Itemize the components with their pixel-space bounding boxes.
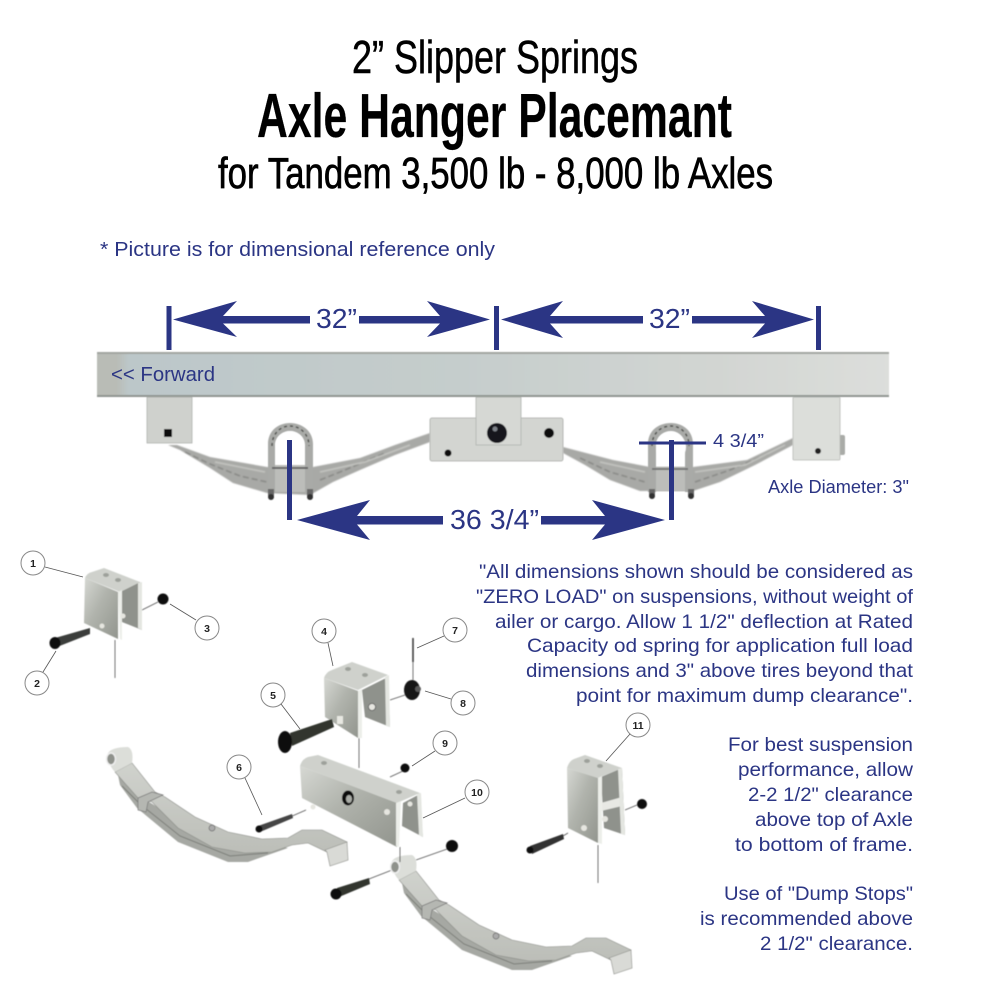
text block: zero load note: "All dimensions shown should be considered as [479,561,913,583]
bolt [526,834,564,854]
title line: tandem axle range: for Tandem 3,500 lb - 8,000 lb Axles [218,149,773,198]
dimension: 4 3/4 inch [639,430,764,451]
text block: clearance recommendation: performance, allow [738,759,914,781]
callout 3: 3 [204,623,210,635]
side view of suspension [97,301,909,540]
right hanger [793,397,845,460]
callout 2 [25,651,56,695]
text block: dump stops: 2 1/2" clearance. [760,933,913,955]
dimension: 4 3/4 inch: 4 3/4” [713,430,764,451]
callout 5: 5 [270,690,276,702]
dimension: 32 inch right: 32” [649,303,690,334]
text block: zero load note: point for maximum dump clearance". [576,685,913,707]
right leaf spring [563,438,793,491]
callout 1 [21,551,83,577]
text block: zero load note: "ZERO LOAD" on suspensions, without weight of [476,586,914,608]
leaf spring upper left [106,747,348,866]
nut [637,799,647,809]
callout 3 [170,604,219,640]
part group 2: upper hanger, bolt, nut, pin [278,638,421,768]
hanger 11 [567,755,625,844]
leaf spring lower right [330,840,632,974]
text block: dump stops: Use of "Dump Stops" [724,883,913,905]
callout 4: 4 [321,626,327,638]
callout 8: 8 [460,698,466,710]
text block: dump stops: is recommended above [700,908,913,930]
equalizer block 10 [300,755,423,847]
center equalizer block and hanger [430,397,563,461]
text block: dump stops [700,883,913,955]
text block: zero load note [476,561,914,707]
callout 1: 1 [30,558,36,570]
text block: clearance recommendation: 2-2 1/2" clearance [748,784,913,806]
text block: zero load note: dimensions and 3" above tires beyond that [526,660,914,682]
callout 11 [606,713,650,761]
dimension: 36 3/4 inch axle spacing [287,440,674,540]
callout 11: 11 [632,720,644,732]
dimension: 32 inch right [494,301,821,350]
part group 3: center equalizer block, bolt, nut [256,755,423,862]
side view photo parts [97,352,889,500]
callout 2: 2 [34,678,40,690]
text block: clearance recommendation: to bottom of frame. [735,834,913,856]
right u-bolt and axle [648,423,694,499]
dimension: 32 inch left: 32” [316,303,357,334]
nut 3 [158,594,168,604]
note: dimensional reference: * Picture is for dimensional reference only [100,239,495,261]
label: axle diameter: Axle Diameter: 3" [768,477,909,497]
pin 7 [412,638,414,662]
part group 1: hanger, bolt, nut [50,568,168,678]
exploded parts diagram [21,551,650,974]
text block: clearance recommendation [728,734,914,856]
callout 8 [425,691,475,715]
text block: zero load note: ailer or cargo. Allow 1 1/2" deflection at Rated [495,611,913,633]
frame beam [97,352,889,397]
part group 4: end hanger, bolt, nut [526,755,647,883]
label: forward direction: << Forward [111,364,215,386]
callout 5 [261,683,300,729]
title line: axle hanger placemant: Axle Hanger Placemant [257,82,732,151]
nut 9 [400,764,410,772]
callout 9 [412,731,457,766]
text block: clearance recommendation: For best suspension [728,734,913,756]
nut 8 [404,680,421,700]
bolt 6 [256,814,293,832]
callout 7: 7 [452,625,458,637]
hanger 4 [324,662,390,738]
dimension: 36 3/4 inch axle spacing: 36 3/4” [450,504,539,535]
left hanger [147,397,192,443]
callout 4 [312,619,336,666]
callout 6 [227,755,262,815]
callout 10 [423,780,489,818]
text block: clearance recommendation: above top of Axle [755,809,913,831]
text block: zero load note: Capacity od spring for application full load [527,635,913,657]
title line: 2 inch slipper springs: 2” Slipper Springs [352,31,638,83]
title block [218,31,773,198]
bolt 2 [50,628,90,649]
callout 6: 6 [236,762,242,774]
left u-bolt and axle [268,423,313,500]
callout 7 [417,618,467,648]
dimension: 32 inch left [166,301,490,350]
callout 10: 10 [471,787,483,799]
hanger 1 [84,568,142,640]
left leaf spring [168,433,430,495]
bolt 5 [278,719,334,753]
callout 9: 9 [442,738,448,750]
